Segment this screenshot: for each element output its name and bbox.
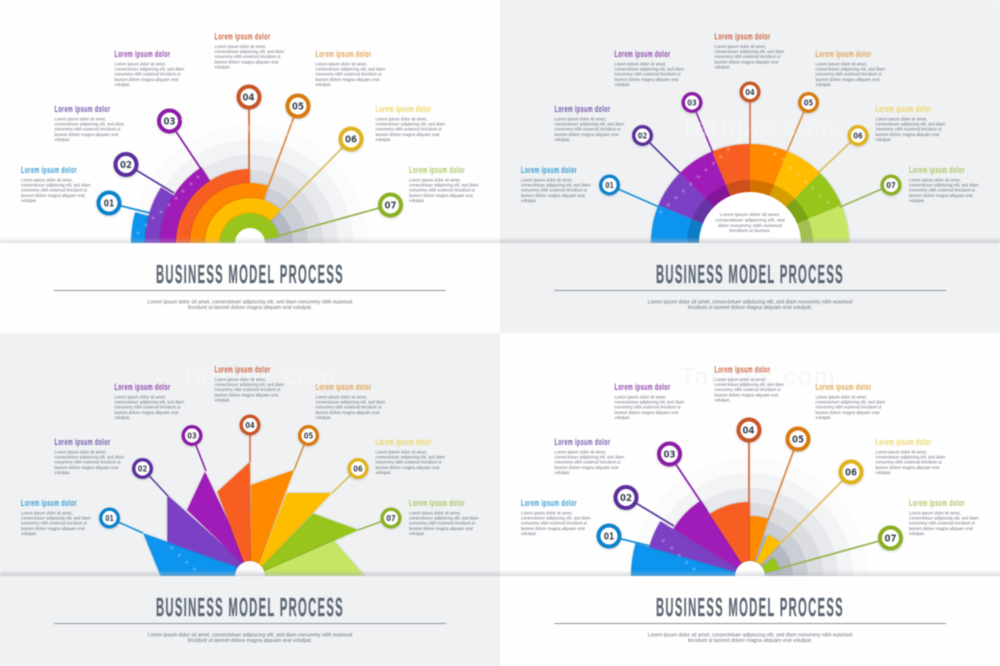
center text: Lorem ipsum dolor sit amet,	[720, 212, 780, 218]
number badges: 02	[120, 160, 132, 171]
number badges: 06	[353, 464, 363, 474]
number badges: 05	[304, 432, 314, 440]
step texts: Lorem ipsum dolor sit amet,	[21, 510, 73, 516]
step texts: volutpat.	[376, 470, 391, 475]
petals	[143, 462, 365, 591]
step texts: nonummy nibh euismod tincidunt ut	[909, 521, 976, 526]
step texts: consectetuer adipiscing elit, sed diam	[554, 455, 625, 460]
step texts: laoreet dolore magna aliquam erat	[376, 132, 440, 137]
step texts: Lorem ipsum dolor sit amet,	[714, 44, 766, 49]
step texts: consectetuer adipiscing elit, sed diam	[521, 183, 591, 188]
watermark dots	[170, 546, 196, 571]
step texts: Lorem ipsum dolor	[376, 104, 432, 115]
step texts: laoreet dolore magna aliquam erat	[21, 193, 86, 198]
step texts: nonummy nibh euismod tincidunt ut	[409, 188, 476, 193]
number badges: 06	[345, 134, 357, 146]
step texts: consectetuer adipiscing elit, sed diam	[909, 516, 979, 521]
step texts: nonummy nibh euismod tincidunt ut	[614, 405, 681, 410]
step texts: Lorem ipsum dolor	[816, 49, 872, 60]
step texts: volutpat.	[54, 470, 70, 475]
step texts: laoreet dolore magna aliquam erat	[876, 132, 940, 137]
number badges: 04	[242, 92, 255, 104]
step texts: Lorem ipsum dolor sit amet,	[376, 450, 427, 454]
step texts: consectetuer adipiscing elit, sed diam	[614, 67, 685, 72]
number badges: 02	[638, 132, 647, 140]
step texts: volutpat.	[714, 397, 730, 402]
watermark: Tarnpik.com	[680, 363, 837, 391]
step texts: consectetuer adipiscing elit, sed diam	[214, 49, 285, 54]
step texts: nonummy nibh euismod tincidunt ut	[376, 460, 442, 465]
step texts: nonummy nibh euismod tincidunt ut	[521, 188, 588, 193]
step texts: volutpat.	[521, 531, 537, 536]
step texts: volutpat.	[554, 137, 570, 142]
step texts: nonummy nibh euismod tincidunt ut	[214, 54, 281, 59]
step texts: consectetuer adipiscing elit, sed diam	[409, 516, 479, 521]
step texts: Lorem ipsum dolor sit amet,	[554, 116, 606, 122]
step texts: Lorem ipsum dolor sit amet,	[521, 178, 573, 182]
footer panel: tincidunt ut laoreet dolore magna aliquam erat volutpat.	[188, 638, 312, 644]
step texts: laoreet dolore magna aliquam erat	[816, 410, 880, 415]
step texts: Lorem ipsum dolor	[316, 49, 372, 60]
number badges: 03	[664, 450, 676, 460]
step texts: Lorem ipsum dolor sit amet,	[21, 178, 73, 182]
connector lines	[109, 97, 390, 236]
step texts: volutpat.	[114, 415, 130, 420]
step texts: consectetuer adipiscing elit, sed diam	[114, 400, 185, 405]
number badges: 04	[742, 426, 755, 436]
step texts: laoreet dolore magna aliquam erat	[714, 59, 779, 64]
step texts: consectetuer adipiscing elit, sed diam	[614, 400, 685, 405]
number badges: 06	[845, 468, 857, 478]
number badges: 02	[620, 493, 632, 504]
step texts: Lorem ipsum dolor	[54, 104, 111, 115]
concentric colour rings	[131, 167, 281, 258]
step texts: nonummy nibh euismod tincidunt ut	[54, 127, 121, 132]
step texts: laoreet dolore magna aliquam erat	[54, 465, 119, 470]
step texts: nonummy nibh euismod tincidunt ut	[876, 460, 942, 465]
step texts: consectetuer adipiscing elit, sed diam	[909, 183, 979, 188]
step texts: Lorem ipsum dolor	[876, 104, 932, 115]
step texts: laoreet dolore magna aliquam erat	[316, 77, 380, 82]
step texts: Lorem ipsum dolor sit amet,	[54, 450, 106, 454]
step texts: Lorem ipsum dolor sit amet,	[909, 510, 961, 516]
step texts: laoreet dolore magna aliquam erat	[521, 526, 586, 531]
footer panel	[500, 576, 1000, 666]
step texts: nonummy nibh euismod tincidunt ut	[54, 460, 121, 465]
step texts: nonummy nibh euismod tincidunt ut	[316, 405, 382, 410]
step texts: nonummy nibh euismod tincidunt ut	[614, 72, 681, 77]
step texts: Lorem ipsum dolor sit amet,	[316, 62, 367, 66]
number badges: 03	[164, 116, 176, 128]
step texts: Lorem ipsum dolor	[21, 498, 77, 509]
step texts: Lorem ipsum dolor sit amet,	[376, 116, 427, 122]
footer panel: Lorem ipsum dolor sit amet, consectetuer adipiscing elit, sed diam nonummy nibh euismod	[648, 632, 852, 638]
step texts: laoreet dolore magna aliquam erat	[214, 59, 279, 64]
step texts: Lorem ipsum dolor sit amet,	[876, 450, 927, 454]
step texts: consectetuer adipiscing elit, sed diam	[876, 455, 946, 460]
step texts: nonummy nibh euismod tincidunt ut	[376, 127, 442, 132]
panel: semicircle segments layout	[500, 0, 1000, 333]
step texts: nonummy nibh euismod tincidunt ut	[714, 387, 781, 392]
step texts: consectetuer adipiscing elit, sed diam	[554, 122, 625, 127]
step texts: consectetuer adipiscing elit, sed diam	[714, 49, 785, 54]
step texts: Lorem ipsum dolor	[376, 437, 432, 448]
number badges: 03	[687, 98, 697, 108]
step texts: laoreet dolore magna aliquam erat	[521, 193, 586, 198]
number badges: 04	[245, 421, 255, 430]
step texts: Lorem ipsum dolor sit amet,	[909, 178, 961, 182]
step texts: consectetuer adipiscing elit, sed diam	[21, 183, 91, 188]
step texts: laoreet dolore magna aliquam erat	[21, 526, 86, 531]
step texts: Lorem ipsum dolor	[521, 498, 577, 509]
step texts: volutpat.	[876, 137, 891, 142]
watermark: Tarnpik.com	[180, 363, 337, 391]
step texts: volutpat.	[409, 531, 425, 536]
step texts: Lorem ipsum dolor	[114, 382, 171, 393]
step texts: volutpat.	[909, 198, 925, 203]
number badges: 07	[386, 514, 396, 523]
step texts: Lorem ipsum dolor sit amet,	[214, 44, 266, 49]
background grey rings	[632, 458, 868, 666]
number badges: 05	[804, 98, 814, 108]
panel: varied radius sectors layout	[500, 333, 1000, 666]
footer panel	[0, 243, 500, 333]
number badges: 07	[884, 534, 896, 544]
number badges: 07	[886, 181, 896, 190]
step texts: volutpat.	[816, 415, 831, 420]
step texts: volutpat.	[316, 415, 331, 420]
step texts: Lorem ipsum dolor	[521, 165, 577, 176]
number badges: 05	[292, 102, 304, 112]
step texts: volutpat.	[214, 64, 230, 69]
step texts	[21, 364, 479, 536]
step texts: laoreet dolore magna aliquam erat	[316, 410, 380, 415]
step texts: laoreet dolore magna aliquam erat	[114, 77, 179, 82]
step texts: Lorem ipsum dolor sit amet,	[816, 62, 867, 66]
number badges: 05	[792, 434, 804, 446]
footer panel: Lorem ipsum dolor sit amet, consectetuer adipiscing elit, sed diam nonummy nibh euismod	[148, 300, 352, 306]
step texts: laoreet dolore magna aliquam erat	[614, 410, 679, 415]
step texts: Lorem ipsum dolor	[614, 382, 671, 393]
step texts: Lorem ipsum dolor	[714, 364, 771, 376]
step texts: laoreet dolore magna aliquam erat	[376, 465, 440, 470]
step texts: laoreet dolore magna aliquam erat	[214, 392, 279, 397]
step texts: laoreet dolore magna aliquam erat	[614, 77, 679, 82]
step texts: volutpat.	[376, 137, 391, 142]
step texts: Lorem ipsum dolor	[876, 437, 932, 448]
step texts: Lorem ipsum dolor sit amet,	[714, 377, 766, 382]
step texts	[521, 364, 979, 536]
step texts: consectetuer adipiscing elit, sed diam	[21, 516, 91, 521]
step texts: Lorem ipsum dolor	[554, 104, 611, 115]
footer panel: Lorem ipsum dolor sit amet, consectetuer adipiscing elit, sed diam nonummy nibh euismod	[648, 300, 852, 306]
panel: folded petals layout	[0, 333, 500, 666]
step texts: Lorem ipsum dolor sit amet,	[114, 394, 166, 400]
step texts: volutpat.	[521, 198, 537, 203]
step texts: laoreet dolore magna aliquam erat	[114, 410, 179, 415]
step texts: consectetuer adipiscing elit, sed diam	[316, 400, 386, 405]
step texts: consectetuer adipiscing elit, sed diam	[816, 400, 886, 405]
step texts: consectetuer adipiscing elit, sed diam	[816, 67, 886, 72]
footer panel: tincidunt ut laoreet dolore magna aliquam erat volutpat.	[688, 305, 812, 311]
step texts: consectetuer adipiscing elit, sed diam	[54, 122, 125, 127]
watermark dots	[659, 148, 829, 213]
number badges: 07	[384, 200, 396, 212]
step texts: Lorem ipsum dolor sit amet,	[614, 394, 666, 400]
step texts: Lorem ipsum dolor	[316, 382, 372, 393]
number badges: 01	[104, 198, 114, 210]
connector lines	[609, 92, 891, 207]
number badges	[601, 83, 900, 194]
step texts: nonummy nibh euismod tincidunt ut	[214, 387, 281, 392]
step texts: nonummy nibh euismod tincidunt ut	[876, 127, 942, 132]
step texts: volutpat.	[909, 531, 925, 536]
step texts: Lorem ipsum dolor	[409, 498, 465, 509]
watermark dots	[662, 539, 696, 571]
footer panel: Lorem ipsum dolor sit amet, consectetuer adipiscing elit, sed diam nonummy nibh euismod	[148, 632, 352, 638]
step texts: laoreet dolore magna aliquam erat	[554, 465, 619, 470]
center text: consectetuer adipiscing elit, sed	[715, 218, 785, 224]
connector lines	[609, 430, 890, 569]
semicircle segments	[651, 144, 849, 306]
watermark: Tarnpik.com	[180, 114, 337, 142]
step texts: nonummy nibh euismod tincidunt ut	[554, 460, 621, 465]
step texts	[21, 32, 479, 203]
step texts: consectetuer adipiscing elit, sed diam	[214, 382, 285, 387]
step texts: volutpat.	[614, 82, 630, 87]
center text: diam nonummy nibh euismod	[718, 223, 782, 229]
step texts: volutpat.	[21, 198, 37, 203]
step texts: Lorem ipsum dolor	[714, 32, 771, 42]
step texts: consectetuer adipiscing elit, sed diam	[376, 122, 446, 127]
step texts: laoreet dolore magna aliquam erat	[816, 77, 880, 82]
step texts: consectetuer adipiscing elit, sed diam	[54, 455, 125, 460]
footer panel: tincidunt ut laoreet dolore magna aliquam erat volutpat.	[688, 638, 812, 644]
step texts: laoreet dolore magna aliquam erat	[909, 193, 974, 198]
step texts: Lorem ipsum dolor sit amet,	[409, 510, 461, 516]
number badges: 06	[853, 132, 863, 140]
step texts	[521, 32, 979, 203]
step texts: laoreet dolore magna aliquam erat	[54, 132, 119, 137]
step texts: Lorem ipsum dolor	[816, 382, 872, 393]
step texts: volutpat.	[54, 137, 70, 142]
step texts: nonummy nibh euismod tincidunt ut	[521, 521, 588, 526]
step texts: Lorem ipsum dolor sit amet,	[409, 178, 461, 182]
background grey rings	[132, 125, 368, 361]
number badges: 01	[604, 532, 614, 542]
step texts: nonummy nibh euismod tincidunt ut	[316, 72, 382, 77]
step texts: Lorem ipsum dolor sit amet,	[214, 377, 266, 382]
step texts: nonummy nibh euismod tincidunt ut	[21, 188, 88, 193]
step texts: Lorem ipsum dolor	[214, 32, 271, 42]
step texts: Lorem ipsum dolor sit amet,	[54, 116, 106, 122]
footer panel: tincidunt ut laoreet dolore magna aliquam erat volutpat.	[188, 305, 312, 311]
step texts: consectetuer adipiscing elit, sed diam	[714, 382, 785, 387]
watermark dots	[136, 175, 200, 235]
step texts: nonummy nibh euismod tincidunt ut	[409, 521, 476, 526]
number badges: 02	[138, 464, 147, 474]
step texts: consectetuer adipiscing elit, sed diam	[376, 455, 446, 460]
step texts: Lorem ipsum dolor	[114, 49, 171, 60]
step texts: consectetuer adipiscing elit, sed diam	[521, 516, 591, 521]
step texts: Lorem ipsum dolor	[554, 437, 611, 448]
step texts: volutpat.	[614, 415, 630, 420]
center text	[715, 212, 785, 234]
footer panel: BUSINESS MODEL PROCESS	[156, 592, 344, 622]
step texts: laoreet dolore magna aliquam erat	[714, 392, 779, 397]
number badges	[101, 416, 400, 527]
step texts: Lorem ipsum dolor sit amet,	[521, 510, 573, 516]
step texts: Lorem ipsum dolor sit amet,	[816, 394, 867, 400]
colour sectors	[631, 500, 781, 591]
step texts: Lorem ipsum dolor	[614, 49, 671, 60]
step texts: Lorem ipsum dolor sit amet,	[876, 116, 927, 122]
step texts: nonummy nibh euismod tincidunt ut	[114, 72, 181, 77]
step texts: laoreet dolore magna aliquam erat	[909, 526, 974, 531]
step texts: nonummy nibh euismod tincidunt ut	[816, 72, 882, 77]
number badges	[598, 420, 901, 548]
step texts: volutpat.	[214, 397, 230, 402]
step texts: volutpat.	[114, 82, 130, 87]
watermark: Tarnpik.com	[680, 114, 837, 142]
connector lines	[109, 425, 391, 533]
step texts: Lorem ipsum dolor	[214, 364, 271, 376]
step texts: volutpat.	[316, 82, 331, 87]
number badges: 01	[105, 514, 114, 523]
step texts: laoreet dolore magna aliquam erat	[409, 193, 474, 198]
number badges	[98, 86, 401, 216]
step texts: nonummy nibh euismod tincidunt ut	[714, 54, 781, 59]
panel: concentric ring layout	[0, 0, 500, 361]
step texts: Lorem ipsum dolor	[21, 165, 77, 176]
center text: tincidunt ut laoreet.	[729, 228, 771, 234]
step texts: Lorem ipsum dolor sit amet,	[554, 450, 606, 454]
step texts: nonummy nibh euismod tincidunt ut	[114, 405, 181, 410]
number badges: 01	[605, 181, 614, 190]
step texts: nonummy nibh euismod tincidunt ut	[816, 405, 882, 410]
step texts: volutpat.	[876, 470, 891, 475]
step texts: laoreet dolore magna aliquam erat	[876, 465, 940, 470]
step texts: volutpat.	[714, 64, 730, 69]
step texts: laoreet dolore magna aliquam erat	[409, 526, 474, 531]
step texts: consectetuer adipiscing elit, sed diam	[316, 67, 386, 72]
step texts: Lorem ipsum dolor	[409, 165, 465, 176]
step texts: consectetuer adipiscing elit, sed diam	[409, 183, 479, 188]
step texts: Lorem ipsum dolor sit amet,	[614, 62, 666, 66]
step texts: Lorem ipsum dolor sit amet,	[316, 394, 367, 400]
step texts: nonummy nibh euismod tincidunt ut	[909, 188, 976, 193]
step texts: volutpat.	[554, 470, 570, 475]
footer panel: BUSINESS MODEL PROCESS	[156, 259, 344, 289]
number badges: 03	[187, 432, 197, 440]
number badges: 04	[745, 88, 755, 97]
step texts: volutpat.	[409, 198, 425, 203]
step texts: nonummy nibh euismod tincidunt ut	[21, 521, 88, 526]
footer panel	[500, 243, 1000, 333]
step texts: volutpat.	[816, 82, 831, 87]
step texts: consectetuer adipiscing elit, sed diam	[876, 122, 946, 127]
step texts: consectetuer adipiscing elit, sed diam	[114, 67, 185, 72]
step texts: volutpat.	[21, 531, 37, 536]
step texts: Lorem ipsum dolor	[54, 437, 111, 448]
footer panel	[0, 576, 500, 666]
step texts: nonummy nibh euismod tincidunt ut	[554, 127, 621, 132]
step texts: laoreet dolore magna aliquam erat	[554, 132, 619, 137]
step texts: Lorem ipsum dolor sit amet,	[114, 62, 166, 66]
